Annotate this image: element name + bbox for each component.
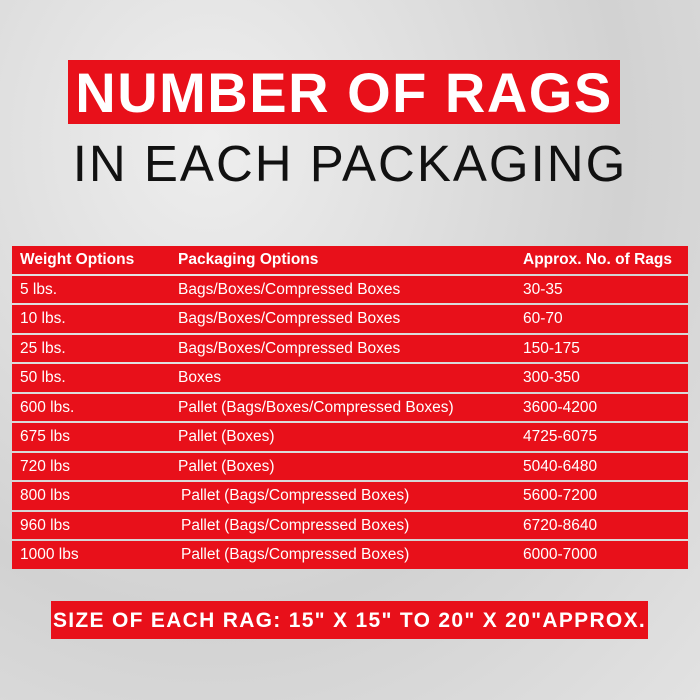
table: 5 lbs. [20,280,57,298]
table: 5040-6480 [523,458,597,474]
table: 3600-4200 [523,398,597,416]
table: 720 lbs [20,458,70,474]
table: 25 lbs. [20,340,66,356]
table: Boxes [178,369,221,386]
table: Pallet (Bags/Boxes/Compressed Boxes) [178,398,454,416]
table [12,246,688,569]
table: 1000 lbs [20,546,79,563]
table: 150-175 [523,340,580,356]
footer callout: SIZE OF EACH RAG: 15" X 15" TO 20" X 20"APPROX. [53,609,646,632]
table: Pallet (Boxes) [178,458,274,474]
subtitle: IN EACH PACKAGING [73,135,627,192]
footer callout [51,601,648,639]
table: 5600-7200 [523,487,597,504]
table: 800 lbs [20,487,70,504]
table: Bags/Boxes/Compressed Boxes [178,280,400,298]
table: 60-70 [523,310,563,327]
table: 960 lbs [20,516,70,534]
table: Pallet (Boxes) [178,428,274,445]
table: 6000-7000 [523,546,597,563]
table: Packaging Options [178,251,318,268]
title: NUMBER OF RAGS [75,61,613,124]
table: 4725-6075 [523,428,597,445]
table: Bags/Boxes/Compressed Boxes [178,340,400,356]
table: 600 lbs. [20,398,74,416]
table: Pallet (Bags/Compressed Boxes) [181,487,409,504]
table: 30-35 [523,280,563,298]
table: Bags/Boxes/Compressed Boxes [178,310,400,327]
table: Weight Options [20,251,134,268]
table: 10 lbs. [20,310,66,327]
table: 6720-8640 [523,516,597,534]
table: 50 lbs. [20,369,66,386]
table: 675 lbs [20,428,70,445]
table: Approx. No. of Rags [523,251,672,268]
table: Pallet (Bags/Compressed Boxes) [181,546,409,563]
table: Pallet (Bags/Compressed Boxes) [181,516,409,534]
table: 300-350 [523,369,580,386]
